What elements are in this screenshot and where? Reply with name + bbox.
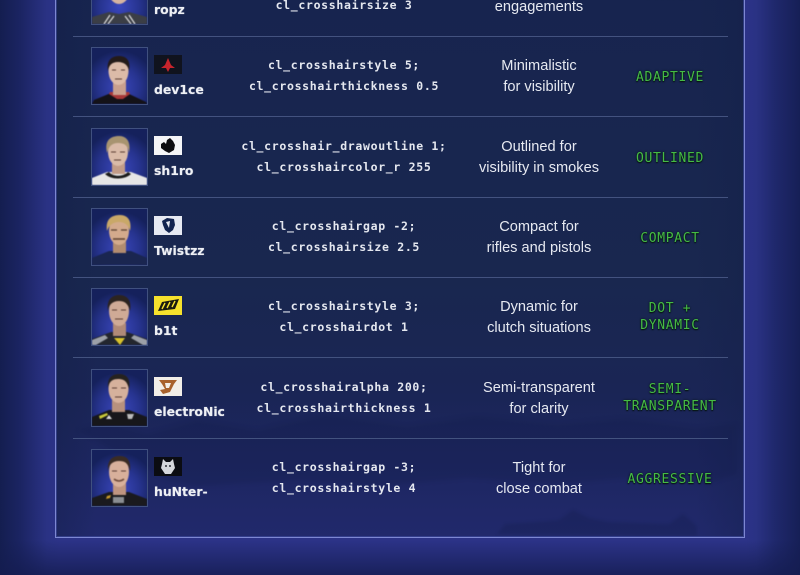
row: dev1ce xyxy=(91,47,704,105)
team logo: Team Spirit xyxy=(154,136,182,155)
avatar: huNter- xyxy=(91,449,148,507)
console command: electroNic: cl_crosshairthickness 1 xyxy=(257,401,431,415)
description: dev1ce xyxy=(501,58,577,95)
description: sh1ro: visibility in smokes xyxy=(479,160,599,176)
console command: dev1ce: cl_crosshairthickness 0.5 xyxy=(249,79,439,93)
description: Twistzz xyxy=(487,219,591,256)
description: b1t: clutch situations xyxy=(487,320,591,336)
style tag: Twistzz: COMPACT xyxy=(640,231,700,246)
team logo: Natus Vincere xyxy=(154,296,182,315)
description: electroNic: Semi-transparent xyxy=(483,380,595,396)
row: huNter- xyxy=(91,449,712,507)
player name: Twistzz: Twistzz xyxy=(154,243,205,258)
style tag: dev1ce: ADAPTIVE xyxy=(636,70,704,85)
row: ropz xyxy=(91,0,695,25)
player name: sh1ro: sh1ro xyxy=(154,163,193,178)
description: b1t xyxy=(487,299,591,336)
description: sh1ro xyxy=(479,139,599,176)
console command: dev1ce xyxy=(249,58,439,93)
console command: huNter-: cl_crosshairgap -3; xyxy=(272,460,416,474)
console command: Twistzz: cl_crosshairsize 2.5 xyxy=(268,240,420,254)
console command: dev1ce: cl_crosshairstyle 5; xyxy=(268,58,420,72)
style tag: b1t: DYNAMIC xyxy=(640,318,700,333)
description: huNter-: close combat xyxy=(496,481,582,497)
description: electroNic: for clarity xyxy=(509,401,569,417)
avatar: ropz xyxy=(91,0,148,25)
style tag: sh1ro: OUTLINED xyxy=(636,151,704,166)
console command: sh1ro xyxy=(241,139,447,174)
description: huNter- xyxy=(496,460,582,497)
console command: Twistzz xyxy=(268,219,420,254)
avatar: dev1ce xyxy=(91,47,148,105)
row: Twistzz xyxy=(91,208,700,266)
row: electroNic xyxy=(91,369,717,427)
row: sh1ro xyxy=(91,128,704,186)
row: b1t xyxy=(91,288,700,346)
console command: b1t: cl_crosshairdot 1 xyxy=(279,320,409,334)
style tag: b1t: DOT + xyxy=(649,301,691,316)
style tag: electroNic: SEMI- xyxy=(649,382,691,397)
avatar: sh1ro xyxy=(91,128,148,186)
console command: electroNic: cl_crosshairalpha 200; xyxy=(260,380,428,394)
console command: Twistzz: cl_crosshairgap -2; xyxy=(272,219,416,233)
console command: huNter-: cl_crosshairstyle 4 xyxy=(272,481,416,495)
team logo: Team Liquid xyxy=(154,216,182,235)
console command: electroNic xyxy=(257,380,431,415)
description: Twistzz: Compact for xyxy=(499,219,579,235)
console command: huNter- xyxy=(272,460,416,495)
player name: b1t: b1t xyxy=(154,323,177,338)
team logo: Astralis xyxy=(154,55,182,74)
description: electroNic xyxy=(483,380,595,417)
player name: electroNic: electroNic xyxy=(154,404,225,419)
description: dev1ce: for visibility xyxy=(503,79,575,95)
description: Twistzz: rifles and pistols xyxy=(487,240,591,256)
team logo: Virtus.pro xyxy=(154,377,182,396)
console command: sh1ro: cl_crosshair_drawoutline 1; xyxy=(241,139,447,153)
description: b1t: Dynamic for xyxy=(500,299,578,315)
player name: ropz: ropz xyxy=(154,2,185,17)
style tag: huNter-: AGGRESSIVE xyxy=(628,472,712,487)
player name: dev1ce: dev1ce xyxy=(154,82,204,97)
style tag: electroNic xyxy=(622,382,717,414)
description: dev1ce: Minimalistic xyxy=(501,58,577,74)
team logo: G2 xyxy=(154,457,182,476)
style tag: electroNic: TRANSPARENT xyxy=(623,399,717,414)
style tag: b1t xyxy=(640,300,700,333)
description: sh1ro: Outlined for xyxy=(501,139,577,155)
avatar: Twistzz xyxy=(91,208,148,266)
description: huNter-: Tight for xyxy=(512,460,566,476)
player name: huNter-: huNter- xyxy=(154,484,208,499)
console command: sh1ro: cl_crosshaircolor_r 255 xyxy=(257,160,431,174)
console command: b1t xyxy=(268,299,420,334)
avatar: electroNic xyxy=(91,369,148,427)
console command: b1t: cl_crosshairstyle 3; xyxy=(268,299,420,313)
avatar: b1t xyxy=(91,288,148,346)
